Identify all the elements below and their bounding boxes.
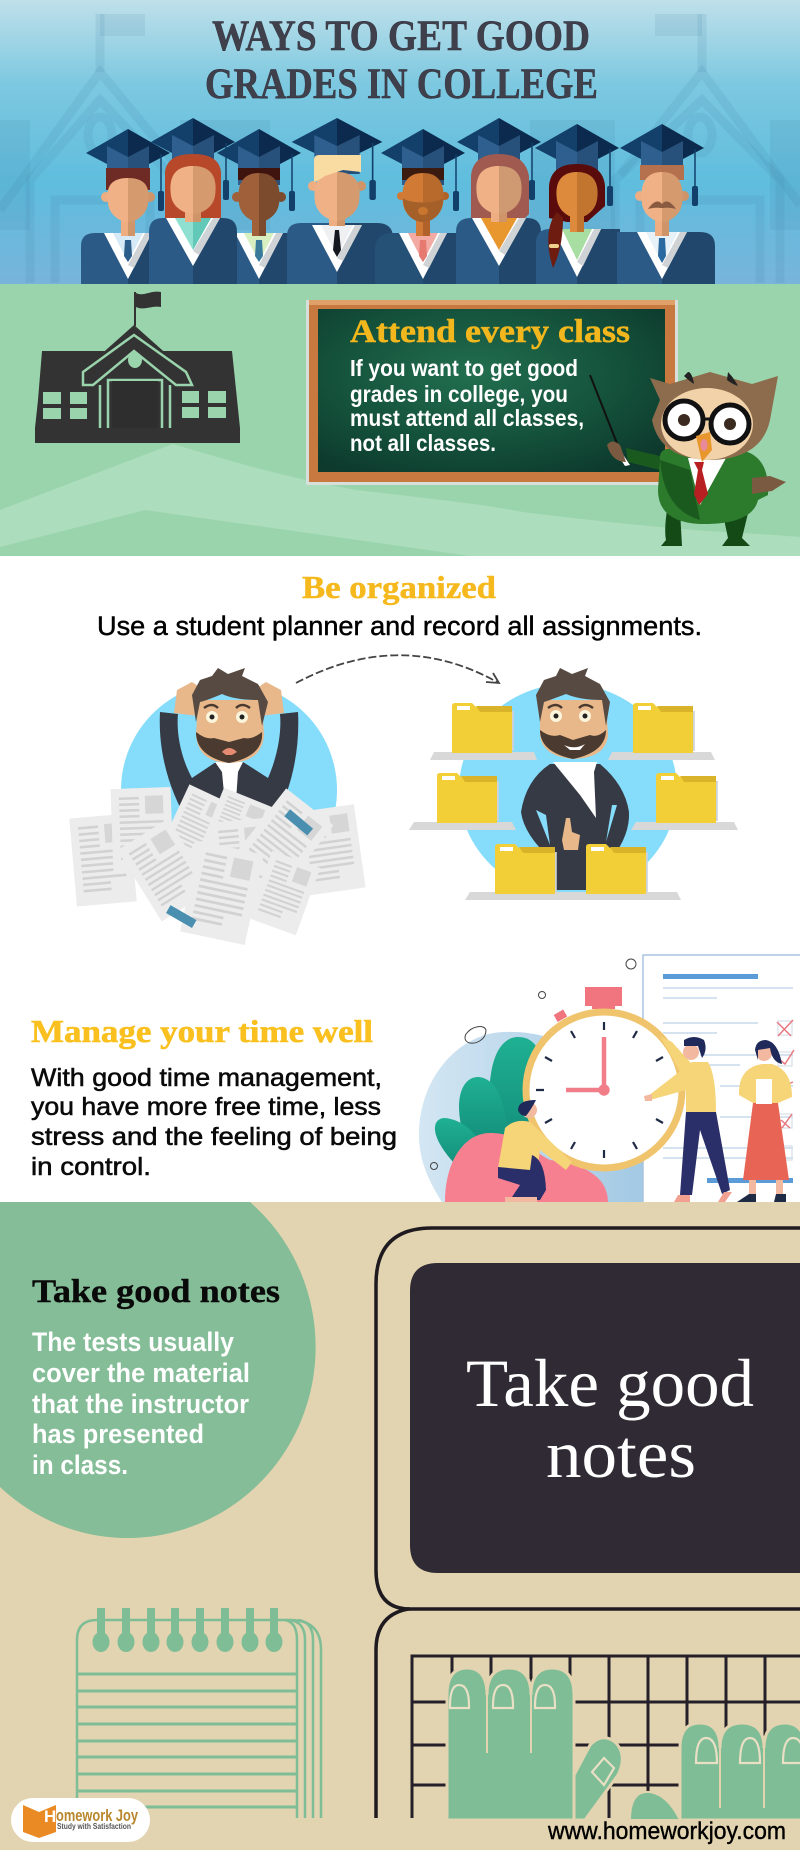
graduate 8: [617, 124, 715, 284]
hero header panel: [0, 0, 800, 284]
graduate 3: [217, 129, 301, 284]
time management body text: stress and the feeling of being: [31, 1123, 397, 1151]
logo text: H: [44, 1807, 56, 1826]
checklist paper: [643, 955, 800, 1205]
title: GRADES IN COLLEGE: [205, 61, 598, 108]
panel: manage your time well: [31, 955, 800, 1205]
standing woman: [737, 1040, 792, 1202]
panel: attend every class: [0, 284, 800, 556]
board heading: Attend every class: [350, 314, 630, 350]
illustration: organized man with folders: [409, 668, 738, 900]
board body text: grades in college, you: [350, 381, 568, 407]
notes body text: The tests usually: [32, 1327, 234, 1357]
icon: right hand typing: [630, 1723, 800, 1820]
board body text: must attend all classes,: [350, 405, 584, 431]
graduate 6: [456, 118, 541, 284]
heading: take good notes: Take good notes: [32, 1274, 280, 1310]
panel: take good notes: [0, 1202, 800, 1850]
stopwatch: [526, 987, 682, 1168]
illustration: clock and people: [419, 955, 800, 1205]
time management body text: [31, 1064, 397, 1181]
board body text: If you want to get good: [350, 355, 578, 381]
notes body text: [32, 1327, 250, 1480]
screen text: [466, 1345, 754, 1492]
notes body text: in class.: [32, 1450, 128, 1480]
graduates group: [81, 118, 715, 284]
pink bush: [445, 1133, 608, 1202]
icon: orange book: [23, 1805, 56, 1838]
website url: www.homeworkjoy.com: [547, 1818, 786, 1845]
subheading text: Use a student planner and record all assignments.: [97, 611, 702, 641]
computer monitor: [376, 1228, 800, 1609]
sitting person: [498, 1100, 572, 1202]
screen text: notes: [546, 1416, 696, 1492]
graduate 7: [535, 124, 620, 284]
panel: be organized: [0, 556, 800, 966]
logo text: Study with Satisfaction: [57, 1822, 131, 1831]
graduate 5: [375, 129, 465, 284]
leaves: [489, 1037, 545, 1140]
board body text: not all classes.: [350, 430, 496, 456]
screen text: Take good: [466, 1345, 754, 1421]
icon: school building: [35, 292, 240, 443]
board body text: [350, 355, 584, 456]
notes body text: that the instructor: [32, 1389, 249, 1419]
title: WAYS TO GET GOOD: [212, 13, 590, 60]
heading: be organized: Be organized: [302, 569, 496, 605]
graduate 2: [149, 118, 237, 284]
icon: spiral notepad: [77, 1608, 321, 1818]
logo text: omework Joy: [56, 1806, 138, 1825]
chalkboard: [306, 300, 678, 485]
arrow: stress to organized: [296, 655, 499, 683]
faded school silhouettes background: [0, 14, 800, 283]
icon: owl teacher: [590, 372, 786, 546]
green circle callout: [0, 1202, 316, 1538]
logo badge: [11, 1798, 150, 1842]
paper pile: [69, 784, 366, 945]
notes body text: cover the material: [32, 1358, 250, 1388]
folders: [437, 703, 718, 894]
shelves: [409, 752, 738, 900]
illustration: stressed man with papers: [69, 668, 366, 945]
time management body text: in control.: [31, 1153, 151, 1181]
title: [205, 13, 598, 108]
logo text: [44, 1806, 138, 1831]
graduate 1: [81, 129, 170, 284]
graduate 4: [287, 118, 393, 284]
mustache: [648, 201, 676, 209]
time management body text: you have more free time, less: [31, 1093, 381, 1121]
heading: manage your time: Manage your time well: [31, 1013, 373, 1049]
time management body text: With good time management,: [31, 1064, 382, 1092]
notes body text: has presented: [32, 1419, 204, 1449]
standing man: [644, 1036, 732, 1202]
icon: left hand typing: [447, 1668, 622, 1820]
keyboard: [376, 1609, 800, 1820]
braid: [548, 212, 563, 268]
